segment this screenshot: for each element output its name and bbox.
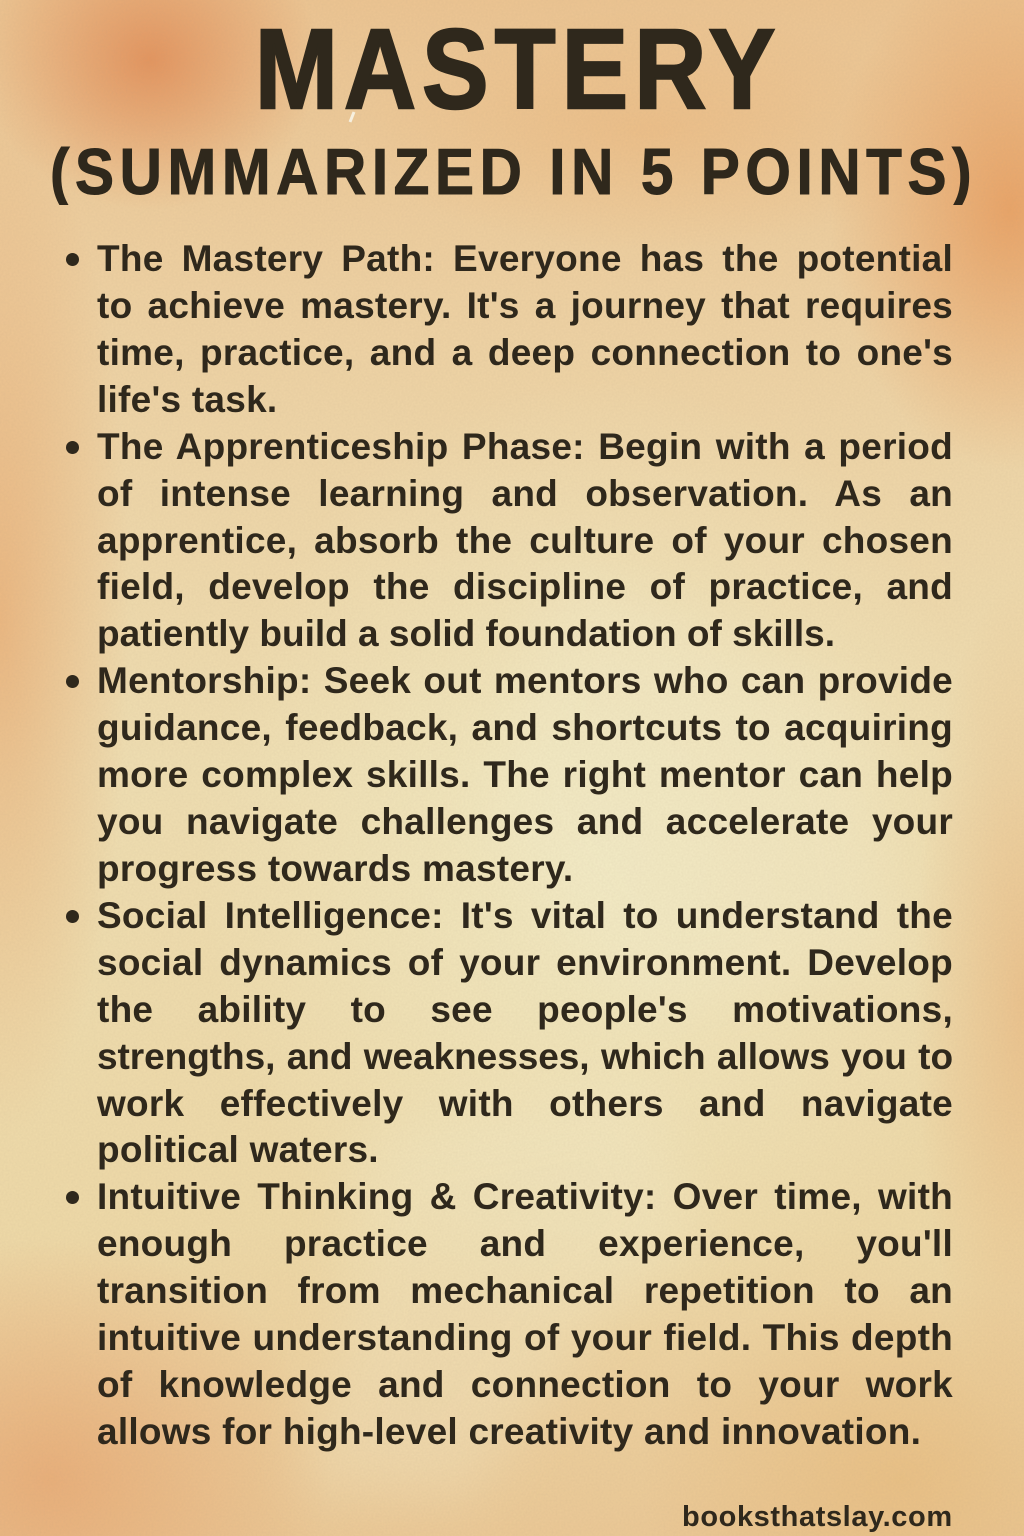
bullet: Intuitive Thinking & Creativity: enough practice and experience, you'll: [97, 1223, 953, 1264]
bullet: Social Intelligence: political waters.: [97, 1129, 379, 1170]
bullet: The Apprenticeship Phase: [66, 426, 953, 654]
bullet: Intuitive Thinking & Creativity: Intuitive Thinking & Creativity: Over time, with: [97, 1176, 953, 1217]
bullet: The Apprenticeship Phase: of intense learning and observation. As an: [97, 473, 953, 514]
bullet: Mentorship: more complex skills. The right mentor can help: [97, 754, 953, 795]
bullet: Social Intelligence: social dynamics of your environment. Develop: [97, 942, 953, 983]
bullet: Social Intelligence: the ability to see people's motivations,: [97, 989, 953, 1030]
bullet: Mentorship: Mentorship: Seek out mentors who can provide: [97, 660, 953, 701]
footer: website: booksthatslay.com: [682, 1501, 953, 1533]
bullet: Social Intelligence: Social Intelligence: It's vital to understand the: [97, 895, 953, 936]
bullet: The Mastery Path: time, practice, and a deep connection to one's: [97, 332, 953, 373]
bullet: Social Intelligence: work effectively with others and navigate: [97, 1083, 953, 1124]
bullet: Mentorship: guidance, feedback, and shortcuts to acquiring: [97, 707, 953, 748]
bullet: The Mastery Path: life's task.: [97, 379, 277, 420]
bullet: Social Intelligence: [66, 895, 953, 1170]
bullet: Intuitive Thinking & Creativity: transition from mechanical repetition to an: [97, 1270, 953, 1311]
bullet: Mentorship: progress towards mastery.: [97, 848, 573, 889]
bullet: Social Intelligence: strengths, and weaknesses, which allows you to: [97, 1036, 953, 1077]
bullet: The Mastery Path: [66, 238, 953, 420]
bullet: Intuitive Thinking & Creativity: intuitive understanding of your field. This depth: [97, 1317, 953, 1358]
bullet: Mentorship: [66, 660, 953, 889]
bullet: The Apprenticeship Phase: patiently build a solid foundation of skills.: [97, 613, 835, 654]
bullet: The Mastery Path: to achieve mastery. It's a journey that requires: [97, 285, 953, 326]
bullet: The Apprenticeship Phase: field, develop the discipline of practice, and: [97, 566, 953, 607]
bullet: The Apprenticeship Phase: apprentice, absorb the culture of your chosen: [97, 520, 953, 560]
bullet: The Apprenticeship Phase: The Apprenticeship Phase: Begin with a period: [97, 426, 953, 467]
bullet: The Mastery Path: The Mastery Path: Everyone has the potential: [97, 238, 953, 279]
bullet: Mentorship: you navigate challenges and accelerate your: [97, 801, 953, 842]
bullet: Intuitive Thinking & Creativity: [66, 1176, 953, 1452]
bullet: Intuitive Thinking & Creativity: of knowledge and connection to your work: [97, 1364, 953, 1405]
bullet: Intuitive Thinking & Creativity: allows for high-level creativity and innovation.: [97, 1411, 921, 1452]
